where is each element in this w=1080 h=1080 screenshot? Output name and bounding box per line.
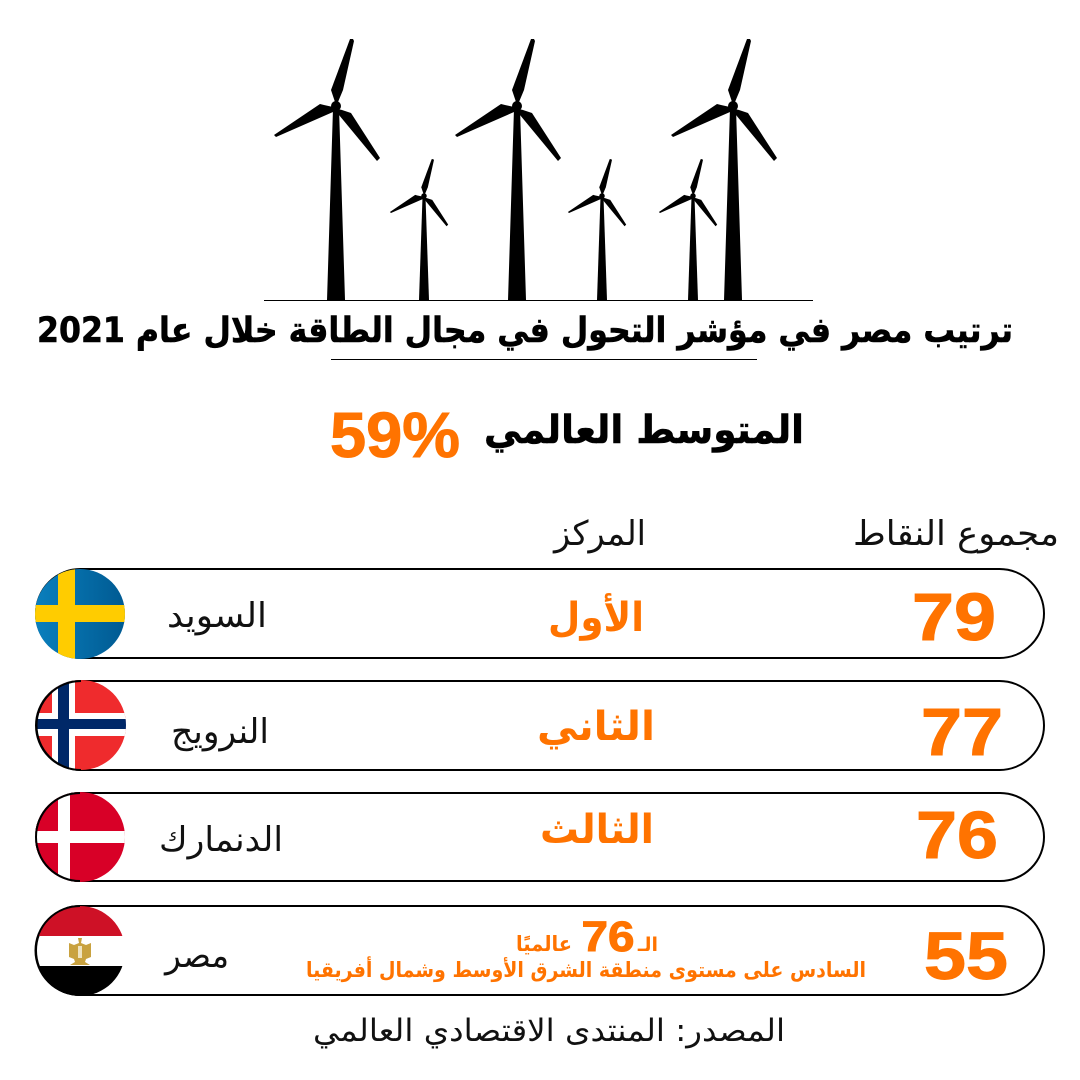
column heading: rank: المركز — [552, 514, 646, 554]
word: globally: عالميًا — [516, 932, 572, 956]
score: 76: 76 — [916, 798, 998, 873]
row: Sweden — [35, 569, 1044, 659]
flag: Egypt — [35, 906, 125, 996]
row: Denmark — [35, 792, 1044, 882]
turbine 1 — [274, 39, 380, 300]
source: المصدر: المنتدى الاقتصادي العالمي — [313, 1013, 785, 1049]
row: Egypt — [35, 906, 1044, 996]
global average label: المتوسط العالمي — [484, 408, 804, 453]
column heading: total points: مجموع النقاط — [853, 514, 1059, 554]
flag: Denmark — [35, 792, 125, 882]
score: 55: 55 — [924, 919, 1008, 994]
country: Denmark: الدنمارك — [159, 820, 283, 860]
small turbine 3 — [659, 159, 717, 300]
row: Norway — [35, 680, 1044, 770]
turbine 2 — [455, 39, 561, 300]
rank: third: الثالث — [540, 807, 654, 853]
illustration: wind turbines — [274, 39, 777, 300]
global average value: 59% — [330, 399, 460, 471]
score: 77: 77 — [921, 695, 1003, 770]
country: Norway: النرويج — [171, 712, 269, 752]
rank: second: الثاني — [537, 704, 655, 750]
rank note: sixth in MENA: السادس على مستوى منطقة الشرق الأوسط وشمال أفريقيا — [306, 955, 866, 982]
turbine 3 — [671, 39, 777, 300]
rank: first: الأول — [548, 592, 644, 641]
flag: Sweden — [35, 569, 125, 659]
score: 79: 79 — [912, 580, 996, 655]
title: ترتيب مصر في مؤشر التحول في مجال الطاقة خلال عام 2021 — [37, 311, 1013, 351]
flag: Norway — [35, 680, 127, 770]
country: Sweden: السويد — [167, 596, 267, 636]
rank note: 76th globally — [516, 913, 658, 961]
small turbine 1 — [390, 159, 448, 300]
value: 76: 76 — [582, 913, 634, 961]
small turbine 2 — [568, 159, 626, 300]
country: Egypt: مصر — [163, 936, 229, 976]
word: ordinal prefix: الـ — [637, 934, 658, 956]
